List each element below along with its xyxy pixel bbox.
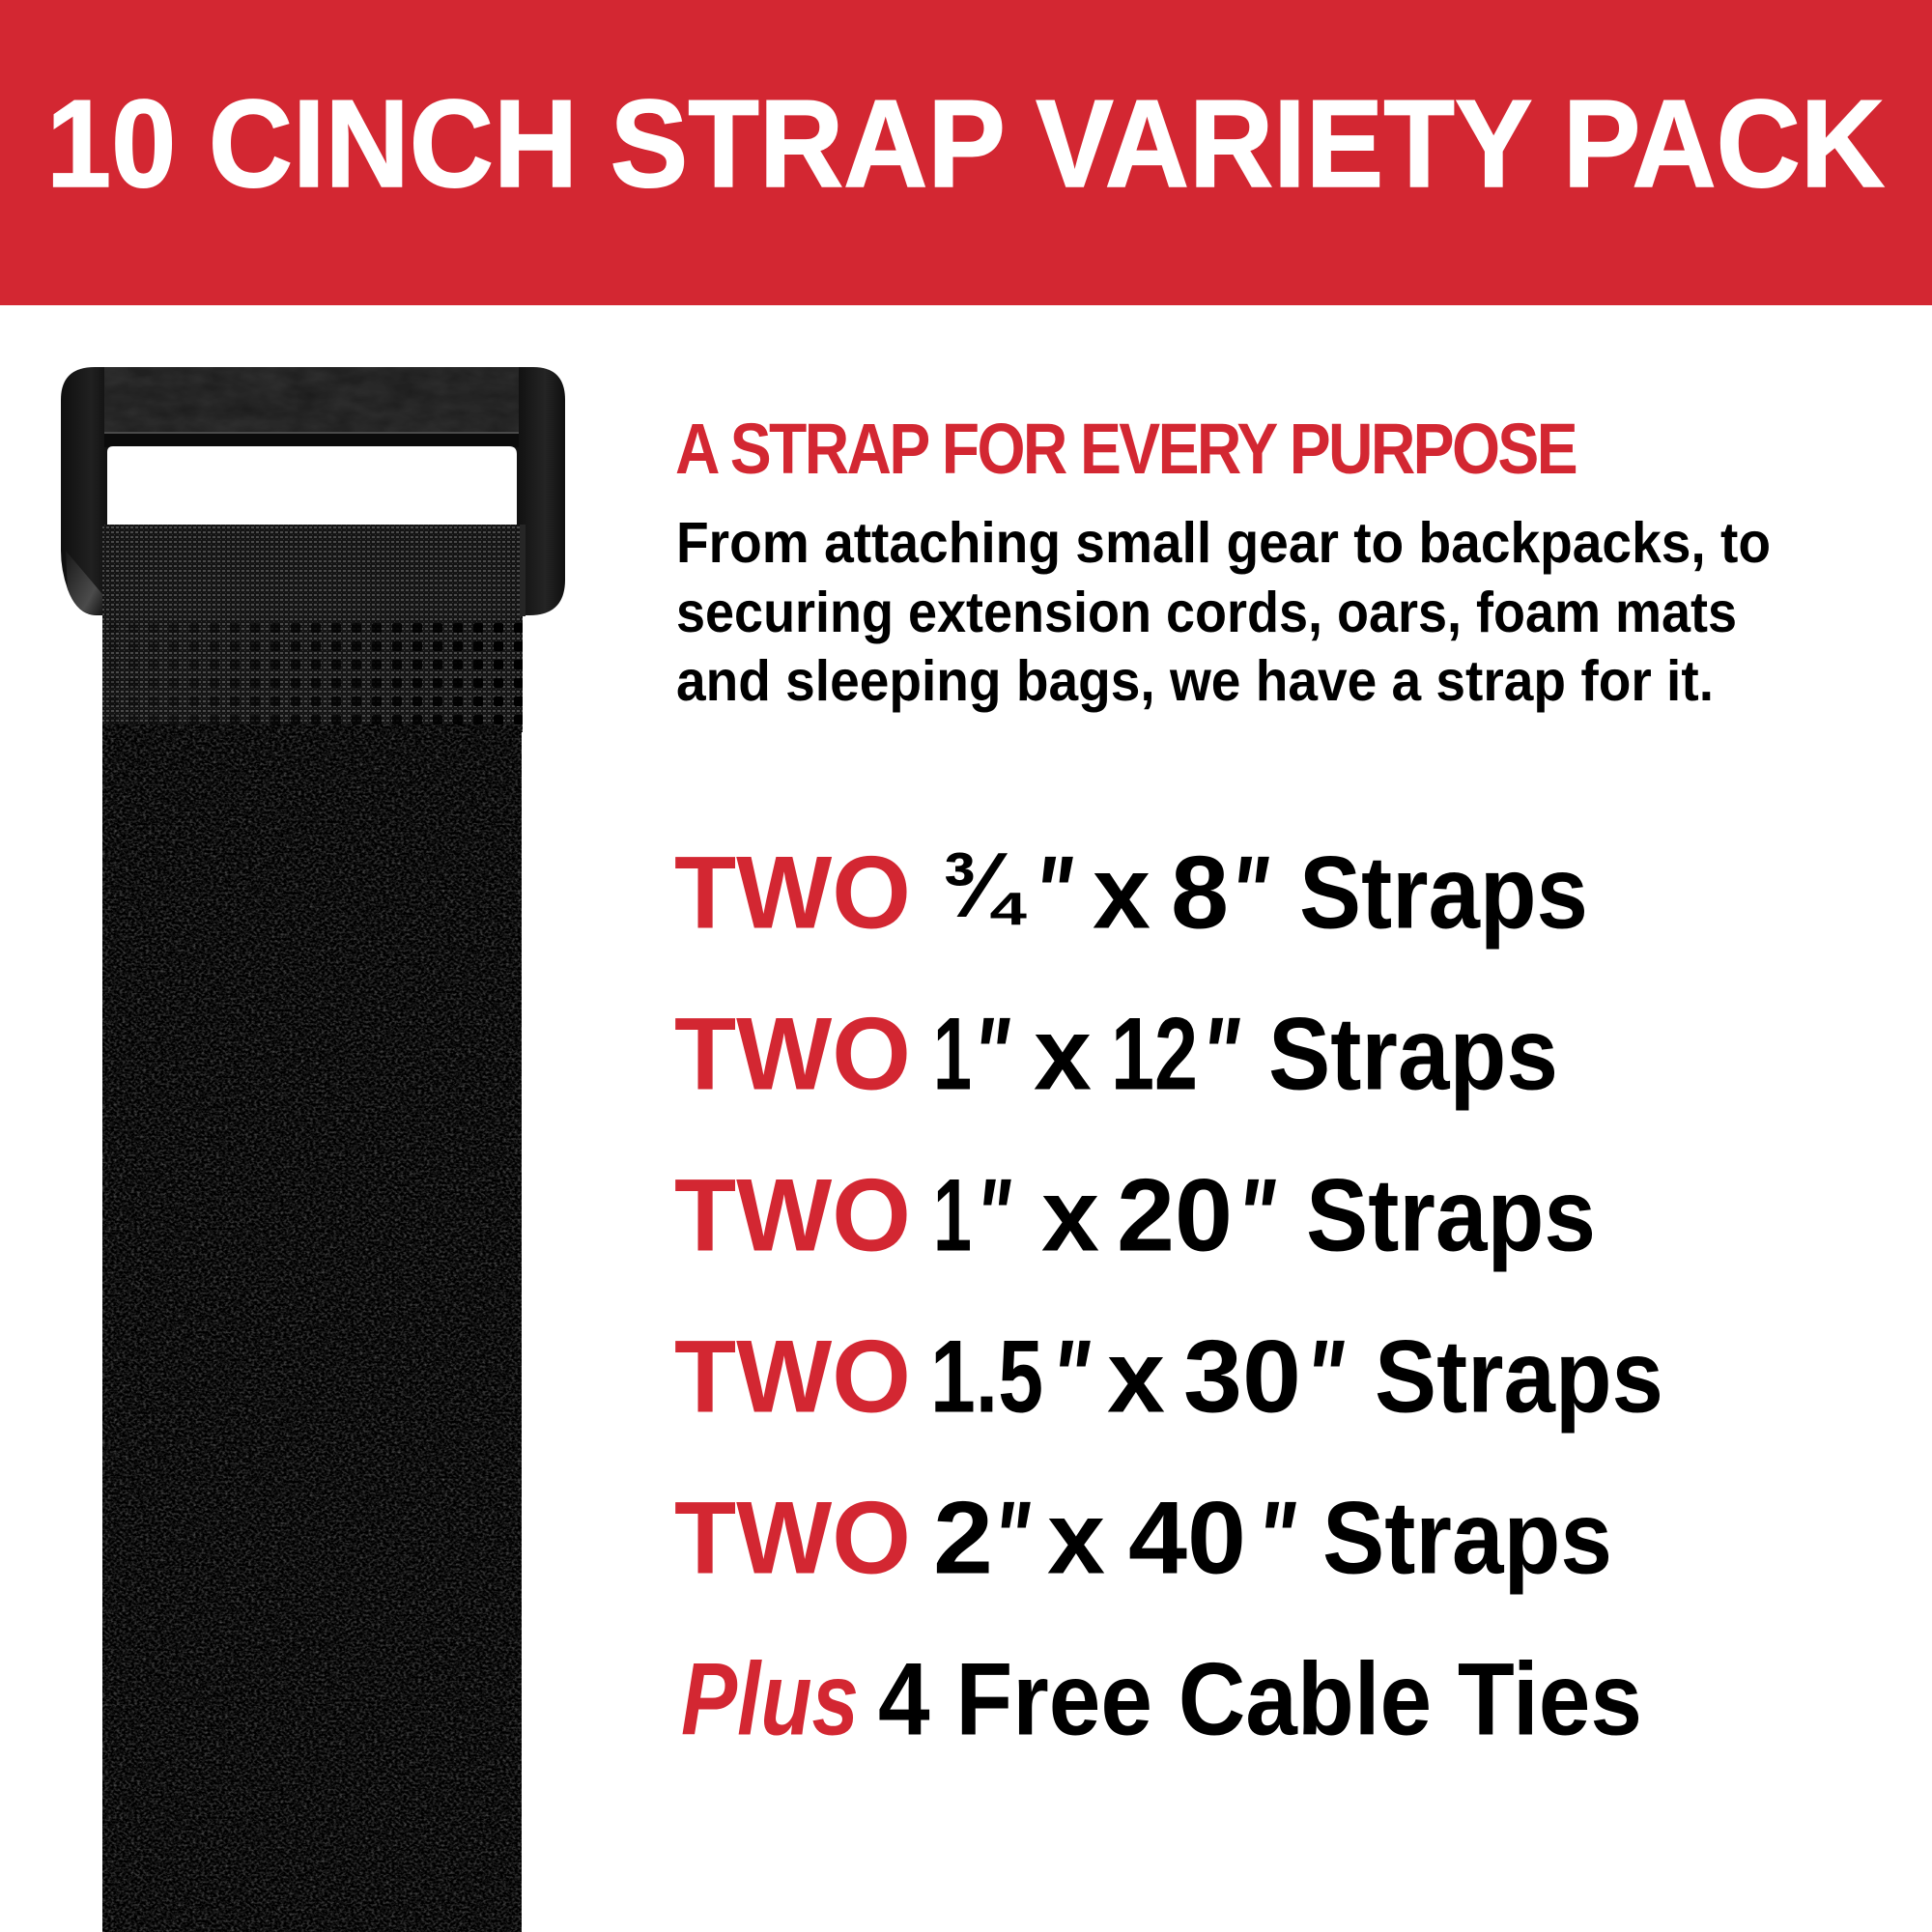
woven strap section: [102, 525, 526, 732]
row: two 1 x 20 straps: 1: [933, 1157, 972, 1273]
row: two 1 x 20 straps: Straps: [1306, 1157, 1596, 1273]
description paragraph: securing extension cords, oars, foam mats: [676, 581, 1737, 644]
row: two 1 x 12 straps: 12: [1111, 995, 1198, 1111]
row: two 1 x 20 straps: x: [1041, 1157, 1099, 1273]
row: two 3/4 x 8 straps: ": [1034, 835, 1073, 951]
row: two 3/4 x 8 straps: x: [1093, 835, 1151, 951]
row: two 1 x 12 straps: [674, 995, 1558, 1111]
row: plus 4 free cable ties: 4 Free Cable Ties: [878, 1640, 1642, 1756]
row: two 1 x 20 straps: ": [1236, 1157, 1276, 1273]
row: two 1 x 20 straps: 20: [1117, 1157, 1233, 1273]
description paragraph: [676, 511, 1771, 713]
row: two 1.5 x 30 straps: [674, 1318, 1663, 1434]
velour strap section: [102, 724, 522, 1932]
product photo: strap with buckle: [61, 367, 565, 1932]
row: two 2 x 40 straps: 2: [933, 1480, 993, 1596]
perforated hook band: [102, 618, 523, 728]
row: two 3/4 x 8 straps: Straps: [1299, 835, 1588, 951]
row: two 2 x 40 straps: [674, 1480, 1612, 1596]
buckle opening: [107, 446, 517, 526]
row: two 1 x 20 straps: TWO: [674, 1157, 911, 1273]
row: two 1 x 12 straps: ": [1201, 995, 1240, 1111]
row: two 1.5 x 30 straps: ": [1305, 1318, 1345, 1434]
row: two 1.5 x 30 straps: TWO: [674, 1318, 911, 1434]
row: two 1 x 20 straps: [674, 1157, 1596, 1273]
row: two 2 x 40 straps: x: [1047, 1480, 1105, 1596]
row: two 1.5 x 30 straps: x: [1107, 1318, 1165, 1434]
row: two 3/4 x 8 straps: ¾: [941, 834, 1027, 937]
row: two 1 x 12 straps: 1: [933, 995, 972, 1111]
row: two 1.5 x 30 straps: ": [1051, 1318, 1091, 1434]
row: two 2 x 40 straps: Straps: [1322, 1480, 1612, 1596]
row: two 2 x 40 straps: 40: [1128, 1480, 1246, 1596]
buckle: [61, 367, 565, 615]
row: two 2 x 40 straps: ": [1257, 1480, 1296, 1596]
description paragraph: From attaching small gear to backpacks, to: [676, 511, 1771, 575]
row: two 3/4 x 8 straps: TWO: [674, 835, 911, 951]
row: two 1 x 12 straps: TWO: [674, 995, 911, 1111]
row: two 2 x 40 straps: TWO: [674, 1480, 911, 1596]
row: two 3/4 x 8 straps: ": [1230, 835, 1269, 951]
row: two 1 x 20 straps: ": [976, 1157, 1011, 1273]
row: two 3/4 x 8 straps: [674, 834, 1588, 951]
row: two 1.5 x 30 straps: 1.5: [930, 1318, 1043, 1434]
row: two 1.5 x 30 straps: Straps: [1375, 1318, 1663, 1434]
row: plus 4 free cable ties: Plus: [681, 1640, 859, 1756]
row: two 1 x 12 straps: Straps: [1268, 995, 1558, 1111]
row: two 3/4 x 8 straps: 8: [1171, 835, 1229, 951]
row: two 1 x 12 straps: ": [973, 995, 1010, 1111]
section heading: A STRAP FOR EVERY PURPOSE: [675, 409, 1577, 489]
description paragraph: and sleeping bags, we have a strap for it.: [676, 649, 1714, 713]
header banner: [0, 0, 1932, 305]
row: two 1 x 12 straps: x: [1034, 995, 1092, 1111]
row: two 1.5 x 30 straps: 30: [1183, 1318, 1301, 1434]
row: two 2 x 40 straps: ": [993, 1480, 1031, 1596]
